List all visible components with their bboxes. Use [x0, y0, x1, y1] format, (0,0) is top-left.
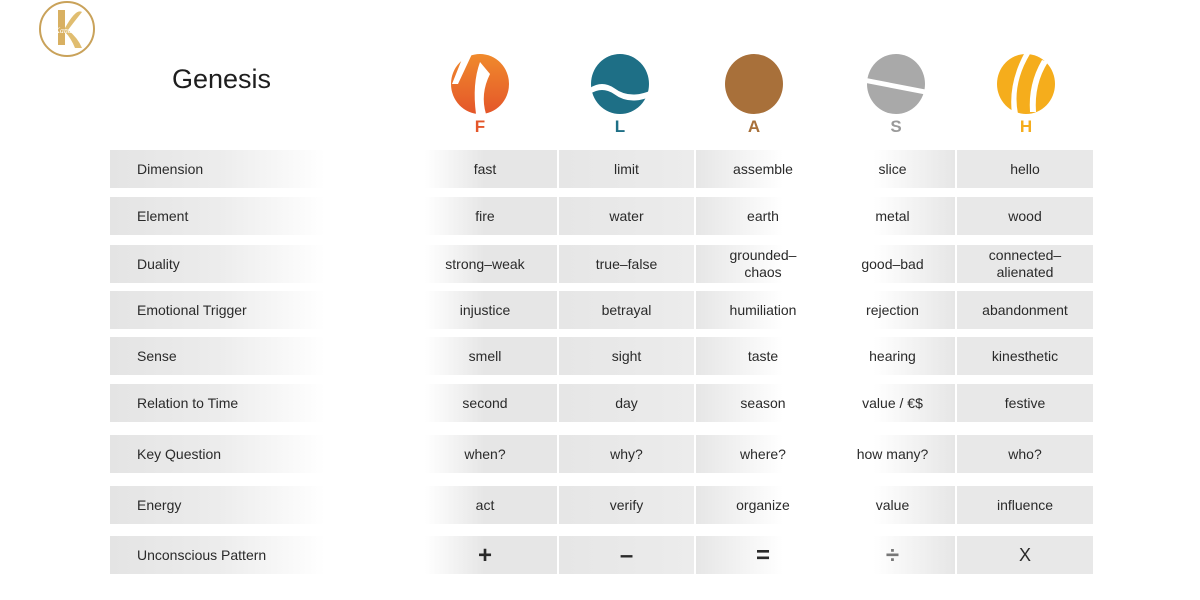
icon: A earth: A [748, 117, 760, 136]
row: Element: metal [875, 208, 910, 224]
row: Energy: Energy [137, 497, 181, 513]
row: Emotional Trigger: Emotional Trigger [137, 302, 247, 318]
row: Duality: strong–weak [445, 256, 525, 272]
row: Sense: hearing [869, 348, 916, 364]
row: Element: fire [475, 208, 495, 224]
row: Key Question: who? [1008, 446, 1042, 462]
row: Relation to Time: festive [1005, 394, 1045, 410]
row: Unconscious Pattern: ÷ [886, 542, 899, 568]
row: Key Question: Key Question [137, 446, 221, 462]
row: Emotional Trigger: injustice [460, 302, 510, 318]
icon: F fire: F [475, 117, 485, 136]
icon: H wood: H [1020, 117, 1032, 136]
logo: Kanaka [54, 26, 79, 35]
row: Relation to Time: season [740, 394, 786, 410]
row: Unconscious Pattern: = [756, 542, 770, 568]
row: Energy: act [476, 496, 494, 512]
title: Genesis [172, 64, 271, 94]
row: Emotional Trigger: rejection [866, 302, 919, 318]
row: Dimension: limit [614, 160, 639, 176]
row: Relation to Time: value / €$ [862, 394, 923, 410]
row: Duality: connected– [989, 247, 1061, 263]
row: Key Question: why? [610, 446, 643, 462]
row: Duality: grounded– [730, 247, 796, 263]
row: Duality: good–bad [861, 256, 924, 272]
row: Unconscious Pattern [110, 536, 1093, 574]
row: Sense: smell [469, 348, 501, 364]
icon: H wood [997, 54, 1055, 136]
row: Element: earth [747, 208, 779, 224]
row: Key Question: where? [740, 446, 786, 462]
row: Unconscious Pattern: + [478, 542, 492, 568]
row: Relation to Time: day [615, 394, 638, 410]
row: Sense [110, 337, 1093, 375]
row: Energy: influence [997, 496, 1053, 512]
row: Key Question: how many? [857, 446, 928, 462]
row: Energy: organize [736, 496, 790, 512]
row: Dimension: hello [1010, 160, 1040, 176]
icon: S metal: S [890, 117, 902, 136]
icon: L water [591, 54, 649, 136]
row: Duality: chaos [744, 264, 782, 280]
row: Dimension: fast [474, 160, 496, 176]
row: Relation to Time: Relation to Time [137, 395, 238, 411]
row: Duality: alienated [997, 264, 1053, 280]
logo [39, 1, 95, 57]
row: Dimension: assemble [733, 160, 793, 176]
row: Sense: Sense [137, 348, 177, 364]
row: Sense: taste [748, 348, 778, 364]
row: Element: wood [1008, 208, 1042, 224]
row: Energy [110, 486, 1093, 524]
row: Element: Element [137, 208, 188, 224]
row: Relation to Time [110, 384, 1093, 422]
row: Key Question: when? [464, 446, 506, 462]
row: Dimension: slice [878, 160, 906, 176]
row: Unconscious Pattern: Unconscious Pattern [137, 547, 266, 563]
row: Element [110, 197, 1093, 235]
row: Relation to Time: second [462, 394, 508, 410]
icon: A earth [725, 54, 783, 136]
row: Sense: kinesthetic [992, 348, 1058, 364]
row: Unconscious Pattern: – [620, 542, 633, 568]
row: Dimension: Dimension [137, 161, 203, 177]
icon: F fire [451, 54, 509, 136]
row: Emotional Trigger: humiliation [730, 302, 796, 318]
row: Duality [110, 245, 1093, 283]
row: Energy: value [876, 496, 909, 512]
row: Duality: true–false [596, 256, 657, 272]
row: Energy: verify [610, 496, 643, 512]
row: Emotional Trigger: abandonment [982, 302, 1068, 318]
row: Unconscious Pattern: X [1019, 544, 1031, 564]
row: Key Question [110, 435, 1093, 473]
icon: L water: L [615, 117, 625, 136]
row: Element: water [609, 208, 644, 224]
row: Emotional Trigger [110, 291, 1093, 329]
row: Emotional Trigger: betrayal [602, 302, 651, 318]
icon: S metal [867, 54, 925, 136]
row: Sense: sight [612, 348, 641, 364]
row: Duality: Duality [137, 256, 180, 272]
row: Dimension [110, 150, 1093, 188]
